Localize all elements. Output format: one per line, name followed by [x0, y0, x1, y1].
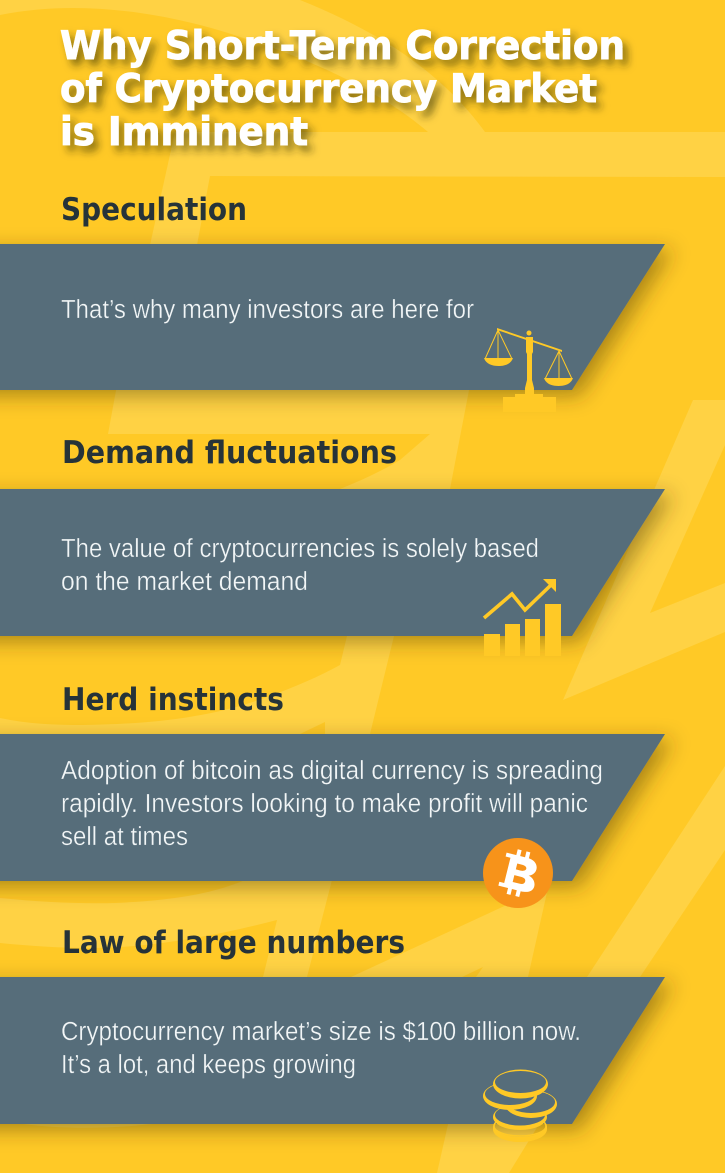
title: is Imminent [60, 110, 308, 155]
section: demand fluctuations [0, 435, 665, 656]
heading: herd instincts: Herd instincts [62, 682, 284, 718]
banner: law of large numbers [0, 977, 665, 1124]
icon: coin stack [483, 1070, 557, 1142]
title: of Cryptocurrency Market [60, 67, 597, 112]
text: herd body [61, 757, 603, 851]
title [60, 24, 625, 155]
text: demand body: The value of cryptocurrencies is solely based [61, 535, 539, 563]
text: herd body: Adoption of bitcoin as digital currency is spreading [61, 757, 603, 785]
icon: growth chart [484, 579, 561, 656]
icon: balance scale [484, 328, 573, 412]
text: demand body [61, 535, 539, 596]
banner: demand fluctuations [0, 489, 665, 636]
text: herd body: rapidly. Investors looking to make profit will panic [61, 790, 588, 818]
title: Why Short-Term Correction [60, 24, 625, 69]
text: herd body: sell at times [61, 823, 188, 851]
banner: herd instincts [0, 734, 665, 881]
section: herd instincts [0, 682, 665, 908]
text: law body: It’s a lot, and keeps growing [61, 1051, 356, 1079]
text: law body [61, 1018, 581, 1079]
banner: speculation [0, 244, 665, 390]
text: demand body: on the market demand [61, 568, 308, 596]
heading: law of large numbers: Law of large numbers [62, 925, 405, 961]
icon: bitcoin coin [483, 838, 553, 908]
section: speculation [0, 192, 665, 412]
heading: demand fluctuations: Demand fluctuations [62, 435, 397, 471]
text: speculation body: That’s why many investors are here for [61, 296, 474, 324]
section: law of large numbers [0, 925, 665, 1142]
heading: speculation: Speculation [61, 192, 247, 228]
text: law body: Cryptocurrency market’s size is $100 billion now. [61, 1018, 581, 1046]
